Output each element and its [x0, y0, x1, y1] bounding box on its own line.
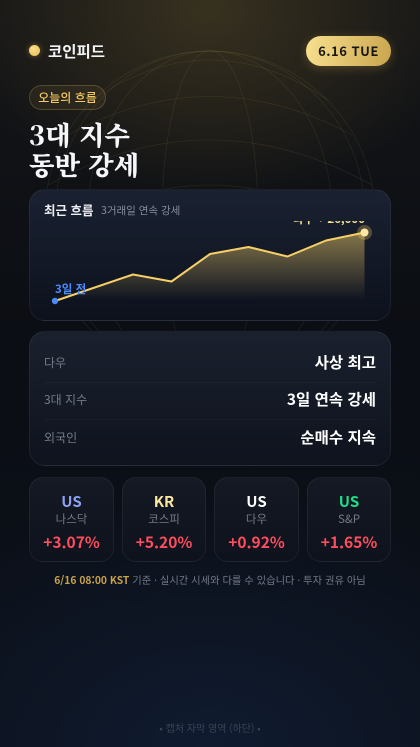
- tile: nasdaq: US: [61, 491, 82, 512]
- row: three indices: [44, 382, 376, 419]
- brand name: 코인피드: [48, 40, 105, 62]
- title: [29, 115, 139, 183]
- tile: kospi: KR: [154, 491, 174, 512]
- row: dow: 다우: [44, 354, 66, 371]
- tile: kospi: 코스피: [148, 511, 180, 527]
- title: 3대 지수: [29, 115, 130, 153]
- row: three indices: 3일 연속 강세: [287, 388, 376, 410]
- tile: kospi: [122, 477, 206, 562]
- tile: s&p: [307, 477, 391, 562]
- title: 동반 강세: [29, 145, 139, 183]
- tag pill: [29, 85, 106, 110]
- row: three indices: 3대 지수: [44, 391, 87, 408]
- panel: recent flow chart: [29, 189, 391, 321]
- tag pill: 오늘의 흐름: [38, 89, 97, 106]
- ad area note: • 캡처 자막 영역 (하단) •: [159, 720, 261, 735]
- footnote: 6/16 08:00 KST 기준 · 실시간 시세와 다를 수 있습니다 · 투자 권유 아님: [54, 572, 366, 587]
- tile: nasdaq: 나스닥: [56, 511, 87, 527]
- tile: s&p: US: [339, 491, 359, 512]
- row: foreigners: [44, 419, 376, 456]
- tile: kospi: +5.20%: [136, 531, 192, 553]
- chart start label: 3일 전: [55, 281, 86, 297]
- date badge: [306, 36, 391, 66]
- tile: dow: US: [246, 491, 267, 512]
- tile: dow: +0.92%: [228, 531, 285, 553]
- tile: dow: 다우: [246, 511, 267, 527]
- chart subheading: 3거래일 연속 강세: [101, 203, 180, 218]
- tile: nasdaq: [29, 477, 114, 562]
- chart heading: 최근 흐름: [44, 200, 94, 219]
- tile: s&p: S&P: [338, 511, 360, 527]
- logo dot: [29, 45, 40, 56]
- row: foreigners: 외국인: [44, 429, 77, 446]
- row: dow: 사상 최고: [315, 351, 376, 373]
- tile: s&p: +1.65%: [321, 531, 377, 553]
- row: dow: [44, 351, 376, 373]
- tile: dow: [214, 477, 299, 562]
- date badge: 6.16 TUE: [318, 41, 379, 60]
- tile: nasdaq: +3.07%: [43, 531, 100, 553]
- row: foreigners: 순매수 지속: [300, 426, 376, 448]
- panel: summary rows: [29, 331, 391, 466]
